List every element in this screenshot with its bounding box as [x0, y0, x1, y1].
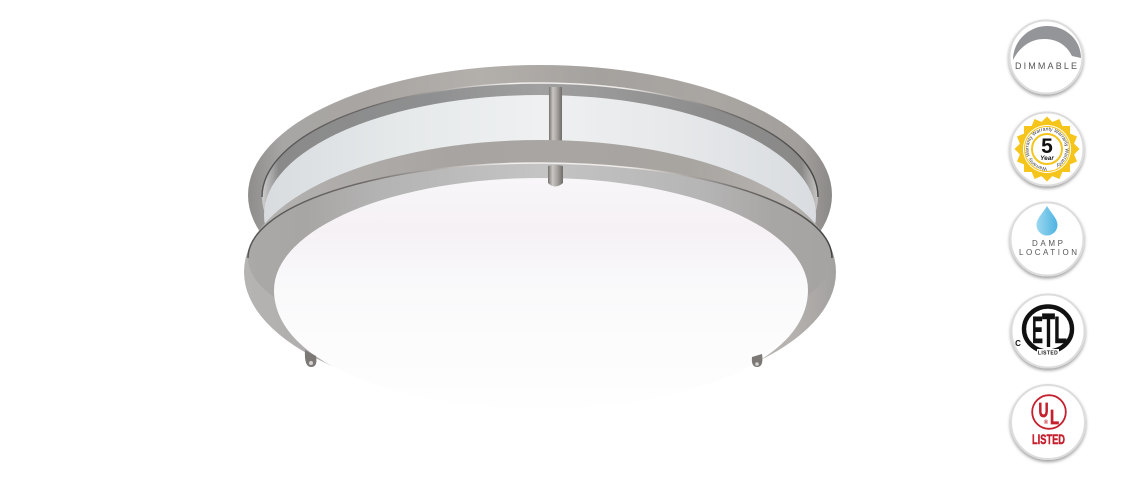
year label: Year [1040, 155, 1054, 162]
warranty ring text: Warranty Warranty Warranty Warranty Warranty [1025, 127, 1070, 171]
badge: damp location [1010, 202, 1084, 276]
ETL letters: L [1054, 310, 1067, 352]
ETL letters: T [1042, 305, 1055, 358]
damp label: DAMP [1032, 239, 1063, 248]
ETL letters: E [1032, 310, 1043, 352]
support pole [549, 87, 562, 143]
inner shaded band [262, 83, 818, 311]
C mark: C [1015, 339, 1021, 348]
registered mark: ® [1044, 419, 1049, 426]
badge: dimmable [1010, 20, 1082, 94]
icon: dimmer arc [1013, 26, 1081, 60]
lower ring highlight [248, 163, 832, 258]
badge: UL listed: L [1050, 407, 1059, 429]
upper ring highlight [262, 83, 818, 197]
upper metal ring [248, 65, 832, 325]
UL letters: U [1038, 400, 1048, 422]
icon: ETL ring [1024, 306, 1072, 352]
white glass cylinder [264, 95, 816, 335]
listed label: LISTED [1032, 431, 1065, 447]
white lens dome [274, 178, 808, 408]
pin left [305, 350, 316, 367]
badge: ETL listed [1012, 294, 1084, 368]
lower inner silver band [248, 163, 832, 353]
ETL letters [1032, 305, 1067, 358]
badge: ETL listed: LISTED [1038, 350, 1058, 356]
badge: 5 year warranty [1008, 112, 1086, 190]
lower metal ring [244, 140, 836, 404]
icon: water drop [1036, 206, 1058, 236]
pin right [752, 354, 762, 367]
dimmable label: DIMMABLE [1015, 61, 1077, 71]
short post [548, 165, 563, 186]
ceiling light fixture [244, 65, 836, 408]
number 5: 5 [1041, 135, 1053, 158]
icon: UL circle [1032, 395, 1066, 429]
icon: yellow seal [1014, 116, 1080, 182]
location label: LOCATION [1019, 248, 1077, 257]
listed tag [1037, 349, 1059, 355]
badge: UL listed [1011, 385, 1085, 459]
